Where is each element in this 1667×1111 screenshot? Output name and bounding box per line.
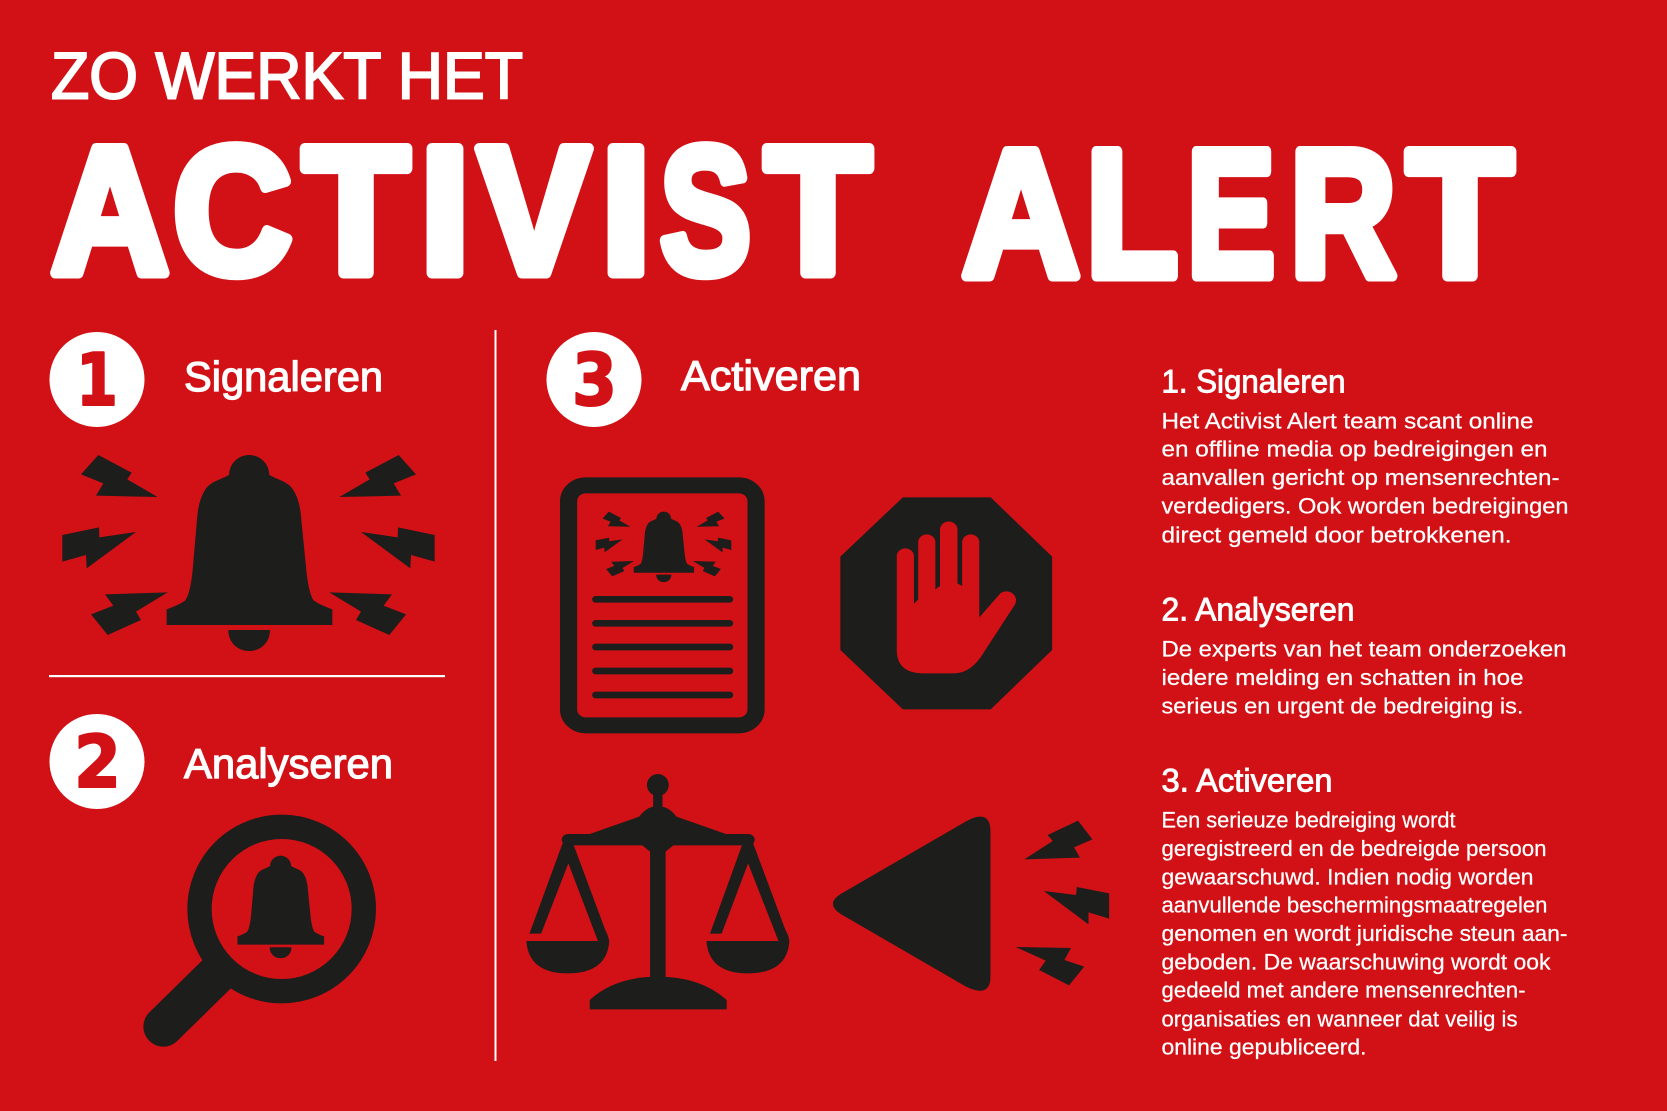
title: ACTIVIST ALERT: E: [1187, 113, 1275, 315]
title: ZO WERKT HET: ZO WERKT HET: [51, 38, 523, 112]
text block: 3. Activeren: aanvullende beschermingsmaatregelen: [1162, 893, 1548, 918]
text block: 1. Signaleren: en offline media op bedreigingen en: [1162, 437, 1548, 462]
title: ACTIVIST ALERT: V: [478, 110, 590, 312]
title: ACTIVIST ALERT: T: [303, 110, 409, 312]
text block: 1. Signaleren: verdedigers. Ook worden bedreigingen: [1162, 493, 1568, 518]
text block: 3. Activeren: 3. Activeren: [1162, 763, 1332, 799]
text block: 3. Activeren: genomen en wordt juridische steun aan-: [1162, 921, 1568, 946]
title: ACTIVIST ALERT: L: [1086, 113, 1178, 315]
text block: 2. Analyseren: [1162, 592, 1566, 718]
icon: megaphone with bolts: [833, 817, 1109, 991]
step 1 heading: Signaleren: [184, 353, 383, 400]
text block: 3. Activeren: gewaarschuwd. Indien nodig worden: [1162, 864, 1534, 889]
step 2 badge: 2: [74, 720, 121, 804]
title: ACTIVIST ALERT: A: [962, 113, 1080, 315]
title: ACTIVIST ALERT: I: [420, 110, 470, 312]
text block: 3. Activeren: online gepubliceerd.: [1162, 1035, 1366, 1060]
text block: 3. Activeren: [1162, 763, 1568, 1060]
title: ACTIVIST ALERT: S: [660, 110, 751, 312]
title: ACTIVIST ALERT: C: [173, 110, 292, 312]
step 3 heading: Activeren: [681, 352, 861, 399]
icon: alert document: [569, 485, 756, 725]
step 1 badge: 1: [76, 338, 118, 422]
title: ACTIVIST ALERT: [51, 110, 1513, 315]
text block: 1. Signaleren: 1. Signaleren: [1162, 364, 1346, 400]
title: ACTIVIST ALERT: I: [601, 110, 651, 312]
icon: stop sign with hand: [840, 497, 1052, 709]
text block: 1. Signaleren: [1162, 364, 1568, 547]
step 1 badge: [50, 332, 144, 427]
text block: 3. Activeren: geregistreerd en de bedreigde persoon: [1162, 836, 1546, 861]
step 3 badge: [546, 332, 642, 427]
divider: horizontal: [49, 675, 445, 677]
step 2 heading: Analyseren: [184, 740, 393, 787]
title: ACTIVIST ALERT: T: [765, 110, 871, 312]
text block: 2. Analyseren: iedere melding en schatten in hoe: [1162, 665, 1524, 690]
text block: 2. Analyseren: 2. Analyseren: [1162, 592, 1354, 628]
icon: alarm bell with lightning bolts: [62, 455, 435, 651]
title: ACTIVIST ALERT: A: [51, 110, 169, 312]
text block: 1. Signaleren: aanvallen gericht op mensenrechten-: [1162, 465, 1560, 490]
text block: 3. Activeren: gedeeld met andere mensenrechten-: [1162, 978, 1526, 1003]
title: ACTIVIST ALERT: R: [1290, 113, 1396, 315]
icon: magnifying glass with bell: [163, 827, 364, 1027]
title: ACTIVIST ALERT: T: [1407, 113, 1513, 315]
text block: 3. Activeren: Een serieuze bedreiging wordt: [1162, 808, 1456, 833]
text block: 3. Activeren: organisaties en wanneer dat veilig is: [1162, 1006, 1518, 1031]
text block: 1. Signaleren: Het Activist Alert team scant online: [1162, 409, 1534, 434]
icon: scales of justice: [526, 774, 789, 1009]
text block: 1. Signaleren: direct gemeld door betrokkenen.: [1162, 522, 1512, 547]
text block: 2. Analyseren: serieus en urgent de bedreiging is.: [1162, 693, 1524, 718]
step 3 badge: 3: [572, 338, 617, 422]
text block: 2. Analyseren: De experts van het team onderzoeken: [1162, 637, 1566, 662]
text block: 3. Activeren: geboden. De waarschuwing wordt ook: [1162, 950, 1551, 975]
step 2 badge: [50, 714, 144, 809]
divider: vertical: [494, 330, 496, 1061]
